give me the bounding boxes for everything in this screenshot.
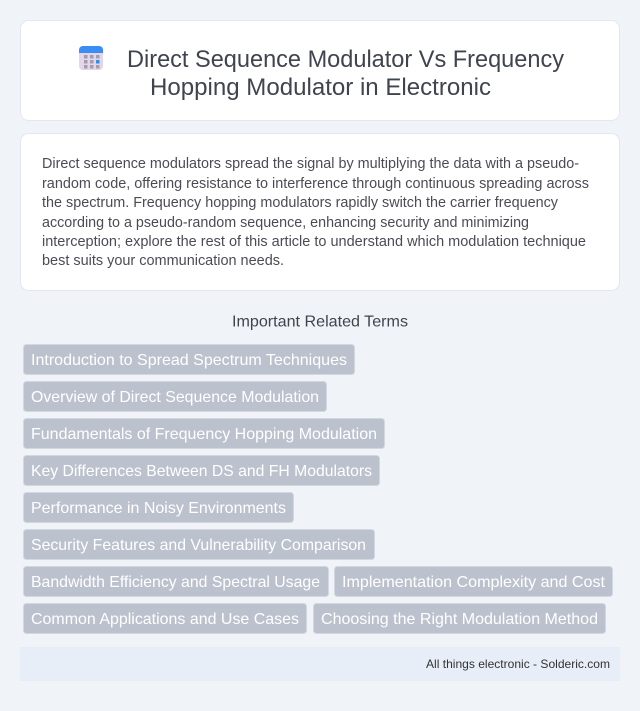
tag: choosing: Choosing the Right Modulation Method <box>321 611 598 628</box>
tag: fundamentals: Fundamentals of Frequency Hopping Modulation <box>31 426 377 443</box>
tag: bandwidth: Bandwidth Efficiency and Spectral Usage <box>31 574 320 591</box>
tag: security: Security Features and Vulnerability Comparison <box>31 537 366 554</box>
title <box>127 46 564 101</box>
text block: intro paragraph: interception; explore the rest of this article to understand which modulation technique <box>42 233 586 250</box>
tag: implementation: Implementation Complexity and Cost <box>342 574 606 591</box>
footer text: All things electronic - Solderic.com <box>426 657 610 671</box>
tag: applications <box>24 604 306 634</box>
title: Direct Sequence Modulator Vs Frequency <box>127 46 564 73</box>
tag: key differences: Key Differences Between DS and FH Modulators <box>31 463 372 480</box>
tag: overview: Overview of Direct Sequence Modulation <box>31 389 319 406</box>
text block: intro paragraph <box>42 155 589 269</box>
title: Hopping Modulator in Electronic <box>150 74 491 101</box>
tag: performance <box>24 492 294 522</box>
heading: important related terms: Important Related Terms <box>232 314 408 330</box>
text block: intro paragraph: Direct sequence modulators spread the signal by multiplying the data with a pseudo- <box>42 155 579 172</box>
tag: bandwidth <box>24 566 328 596</box>
tag: overview <box>24 382 326 412</box>
tag: introduction <box>24 344 354 374</box>
tag: introduction: Introduction to Spread Spectrum Techniques <box>31 352 347 369</box>
tag: choosing <box>314 604 606 634</box>
tag: applications: Common Applications and Use Cases <box>31 611 299 628</box>
footer bar <box>20 647 620 681</box>
text block: intro paragraph: best suits your communication needs. <box>42 252 284 269</box>
text block: intro paragraph: according to a pseudo-random sequence, enhancing security and minimizing <box>42 214 529 231</box>
icon: calendar <box>79 46 103 70</box>
text block: intro paragraph: random code, offering resistance to interference through continuous spreading across <box>42 175 589 192</box>
tag: performance: Performance in Noisy Environments <box>31 500 286 517</box>
text block: intro paragraph: the spectrum. Frequency hopping modulators rapidly switch the carrier frequency <box>42 194 558 211</box>
tag: key differences <box>24 456 380 486</box>
panel: header card <box>20 20 620 120</box>
tag: fundamentals <box>24 418 384 448</box>
panel: intro paragraph card <box>20 134 620 290</box>
tag: implementation <box>334 566 612 596</box>
tag: security <box>24 530 374 560</box>
